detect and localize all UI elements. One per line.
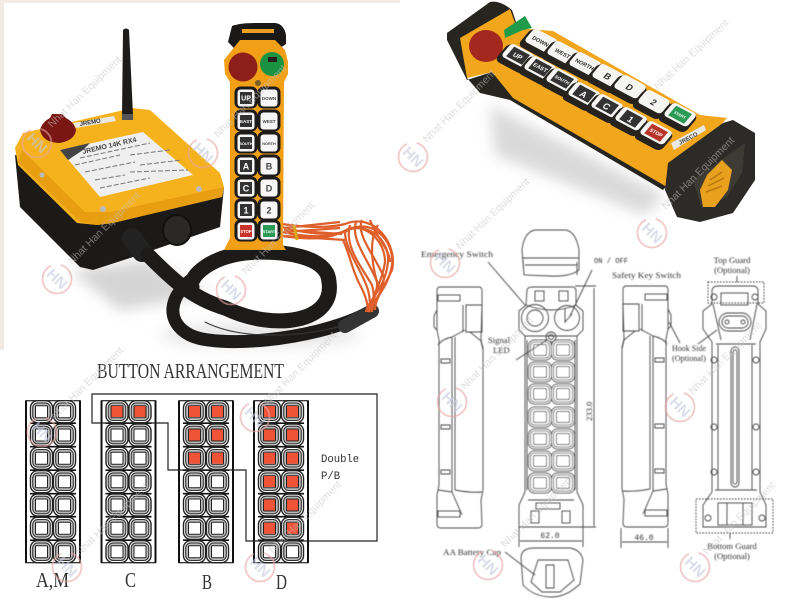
JRECO nameplate — [671, 125, 706, 150]
label: bottom guard: Bottom Guard — [707, 541, 757, 551]
transmitter buttons: B — [266, 162, 273, 172]
dimension: depth 46.0 — [621, 528, 668, 548]
receiver box — [15, 28, 224, 270]
orange wires — [282, 220, 393, 312]
transmitter — [224, 23, 288, 250]
watermark logo letters: HN — [53, 554, 80, 581]
JRECO nameplate: JRECO — [678, 132, 699, 147]
label: bottom guard: (Optional) — [714, 551, 750, 561]
watermark logo letters: HN — [246, 554, 273, 581]
watermarks: Nhat Han Equipment: Nhat Han Equipment — [66, 190, 143, 267]
watermarks: Nhat Han Equipment: Nhat Han Equipment — [459, 315, 536, 392]
angled buttons: START — [673, 110, 688, 120]
watermarks: Nhat Han Equipment: Nhat Han Equipment — [652, 17, 731, 92]
label: signal LED: LED — [493, 345, 510, 355]
layout B: B — [202, 570, 212, 594]
watermarks: Nhat Han Equipment: Nhat Han Equipment — [212, 63, 289, 140]
emergency stop button — [228, 52, 258, 82]
watermarks: Nhat Han Equipment: Nhat Han Equipment — [454, 176, 532, 252]
angled buttons: STOP — [648, 128, 664, 139]
watermark logo letters: HN — [43, 266, 70, 293]
watermarks: Nhat Han Equipment: Nhat Han Equipment — [240, 200, 317, 277]
label: top guard — [714, 255, 751, 282]
layout B — [179, 401, 233, 594]
angled buttons: 2 — [648, 97, 659, 107]
label: top guard: Top Guard — [714, 255, 751, 265]
antenna — [122, 28, 133, 120]
angled buttons: B — [601, 71, 614, 82]
angled buttons: SOUTH — [553, 74, 571, 85]
drawing: back view — [696, 282, 773, 533]
emergency stop button — [469, 30, 503, 62]
photo shadows — [70, 260, 360, 347]
receiver label plate: JREMO 14K RX4 — [82, 137, 137, 156]
angled buttons — [494, 27, 699, 152]
watermark logo letters: HN — [217, 277, 244, 304]
watermark logo letters: HN — [666, 394, 693, 421]
double P/B label: P/B — [321, 471, 340, 483]
transmitter buttons: DOWN — [262, 96, 276, 101]
transmitter buttons: C — [243, 184, 250, 194]
signal beacon — [40, 114, 76, 143]
transmitter buttons: 1 — [243, 206, 249, 216]
panel: top-left edge strip — [0, 0, 400, 350]
transmitter buttons: D — [266, 184, 273, 194]
label: hook side: Hook Side — [672, 343, 706, 353]
transmitter buttons — [234, 86, 280, 242]
watermark logo letters: HN — [638, 220, 665, 247]
transmitter buttons: START — [263, 230, 276, 234]
layout D: D — [276, 570, 287, 594]
dimension: depth 46.0: 46.0 — [634, 534, 654, 543]
label: emergency switch — [421, 249, 525, 305]
watermark logo letters: HN — [399, 144, 426, 171]
angled buttons: D — [623, 82, 636, 93]
watermark logo letters: HN — [431, 250, 458, 277]
drawing: right side view — [622, 286, 671, 527]
angled buttons: C — [600, 101, 613, 112]
double P/B label: Double — [321, 454, 359, 466]
panel: button arrangement diagram — [26, 359, 377, 594]
dimension: width 62.0: 62.0 — [540, 532, 560, 541]
watermark logo letters — [23, 130, 708, 581]
label: top guard: (Optional) — [714, 265, 750, 275]
watermarks: Nhat Han Equipment: Nhat Han Equipment — [687, 320, 764, 397]
dimension: width 62.0 — [519, 527, 583, 547]
angled buttons: WEST — [553, 48, 571, 60]
transmitter buttons: SOUTH — [239, 142, 253, 146]
label: signal LED — [488, 335, 547, 360]
watermarks: Nhat Han Equipment: Nhat Han Equipment — [267, 479, 344, 556]
label: signal LED: Signal — [488, 335, 511, 345]
layout A,M: A,M — [36, 568, 69, 592]
transmitter buttons: A — [243, 162, 250, 172]
label: hook side: (Optional) — [672, 353, 706, 363]
watermark logo letters: HN — [438, 389, 465, 416]
angled buttons: A — [577, 89, 590, 100]
watermark logo letters: HN — [189, 140, 216, 167]
dimension: height 233.0: 233.0 — [584, 402, 594, 421]
watermark logo letters: HN — [241, 404, 268, 431]
layout D — [254, 401, 308, 594]
angled buttons: EAST — [531, 62, 549, 74]
watermark logo letters: HN — [681, 554, 708, 581]
angled buttons: UP — [511, 52, 524, 62]
angled buttons: NORTH — [573, 58, 595, 72]
label: bottom guard — [707, 533, 757, 561]
transmitter body — [460, 9, 727, 187]
watermarks: Nhat Han Equipment: Nhat Han Equipment — [421, 68, 498, 145]
watermarks: Nhat Han Equipment: Nhat Han Equipment — [74, 481, 151, 558]
watermarks: Nhat Han Equipment: Nhat Han Equipment — [499, 473, 576, 550]
layout C — [102, 401, 156, 592]
receiver cable — [132, 238, 372, 342]
angled buttons: DOWN — [530, 36, 550, 49]
watermarks: Nhat Han Equipment: Nhat Han Equipment — [46, 54, 124, 130]
watermarks: Nhat Han Equipment: Nhat Han Equipment — [701, 480, 778, 557]
green key switch — [504, 16, 532, 38]
watermarks: Nhat Han Equipment: Nhat Han Equipment — [262, 330, 339, 407]
label: on/off: ON / OFF — [594, 258, 628, 266]
cable socket — [163, 215, 191, 245]
watermark logo letters: HN — [474, 552, 501, 579]
battery compartment — [700, 160, 732, 207]
transmitter buttons: WEST — [262, 119, 276, 124]
label: on/off — [570, 258, 628, 316]
label: AA battery cap: AA Battery Cap — [443, 547, 501, 557]
label: emergency switch: Emergency Switch — [421, 249, 494, 259]
transmitter buttons: STOP — [240, 229, 252, 234]
watermarks: Nhat Han Equipment: Nhat Han Equipment — [49, 345, 126, 422]
transmitter buttons: UP — [241, 96, 251, 102]
drawing: front view — [519, 287, 583, 527]
transmitter buttons: EAST — [240, 119, 252, 124]
green key switch — [260, 52, 284, 76]
label: AA battery cap — [443, 547, 535, 575]
layout A,M — [26, 401, 80, 592]
panel: dimension drawings — [421, 230, 773, 597]
receiver nameplate: JREMO — [79, 118, 102, 128]
drawing: top cap — [522, 230, 579, 276]
watermark logos — [22, 128, 710, 582]
label: safety key switch: Safety Key Switch — [612, 270, 682, 280]
label: hook side — [669, 322, 717, 363]
transmitter end cap — [665, 120, 755, 222]
watermark logo letters: HN — [28, 419, 55, 446]
layout C: C — [125, 568, 136, 592]
drawing: bottom cap with battery cover — [521, 548, 583, 597]
panel: product photo of receiver and transmitter — [15, 23, 393, 347]
heading: BUTTON ARRANGEMENT — [97, 359, 284, 383]
panel: angled transmitter photo — [447, 2, 755, 222]
angled buttons: 1 — [625, 114, 636, 124]
photo shadow — [490, 105, 665, 215]
drawing: left side view — [434, 287, 483, 528]
receiver nameplate — [73, 116, 116, 128]
double push-button outline — [92, 394, 377, 541]
watermarks: Nhat Han Equipment: Nhat Han Equipment — [660, 135, 737, 212]
watermark logo letters: HN — [23, 130, 50, 157]
transmitter buttons: NORTH — [262, 142, 276, 146]
dimension: height 233.0 — [575, 286, 596, 527]
receiver label plate — [60, 132, 193, 197]
transmitter buttons: 2 — [266, 206, 272, 216]
transmitter top guard — [447, 2, 667, 190]
